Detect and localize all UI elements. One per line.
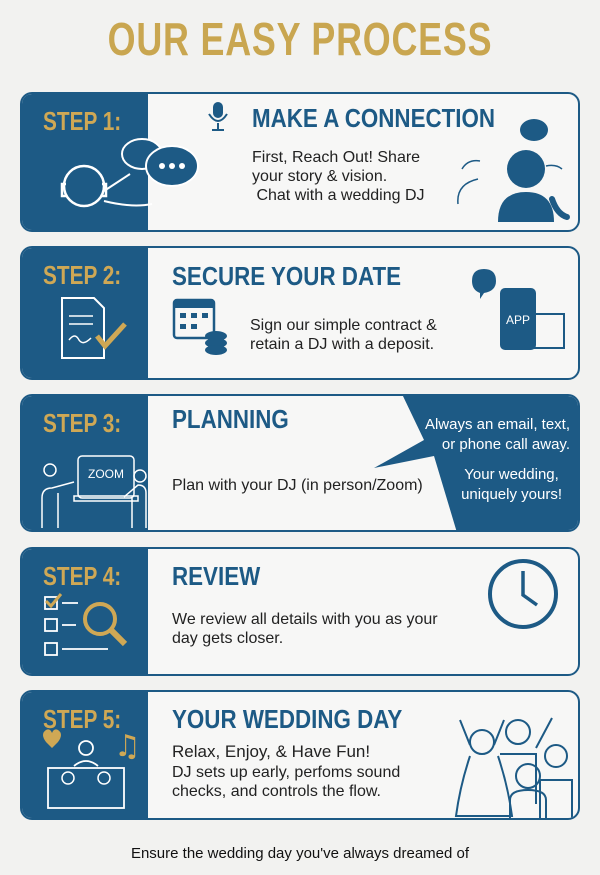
text: Plan with your DJ (in person/Zoom)	[172, 477, 423, 494]
icon: calendar and coins	[172, 298, 227, 355]
icon: wedding party illustration	[454, 718, 573, 818]
icon: person with arrows and phone	[457, 119, 570, 222]
text: day gets closer.	[172, 630, 283, 647]
panel: step 4	[20, 547, 580, 676]
panel: step 3: uniquely yours!	[461, 486, 562, 503]
panel: step 3: Your wedding,	[464, 466, 559, 483]
step 1 label: STEP 1:	[43, 106, 121, 136]
panel: step 1	[20, 92, 580, 232]
callout shape	[374, 396, 578, 530]
icon: two people with zoom screen	[41, 455, 147, 528]
text: your story & vision.	[252, 168, 387, 185]
heading: REVIEW	[172, 561, 260, 591]
text: retain a DJ with a deposit.	[250, 336, 434, 353]
panel: step 5	[20, 690, 580, 820]
step 5 label: STEP 5:	[43, 704, 121, 734]
heading: YOUR WEDDING DAY	[172, 704, 402, 734]
icon: app phone	[472, 269, 565, 350]
step 2 label: STEP 2:	[43, 260, 121, 290]
callout text: or phone call away.	[442, 436, 570, 453]
text: Relax, Enjoy, & Have Fun!	[172, 742, 370, 761]
heading: MAKE A CONNECTION	[252, 103, 495, 133]
text: We review all details with you as your	[172, 611, 438, 628]
icon: DJ booth with heart and note	[43, 729, 141, 809]
title: OUR EASY PROCESS	[108, 13, 492, 65]
text	[172, 611, 438, 647]
heading: SECURE YOUR DATE	[172, 261, 401, 291]
heading: PLANNING	[172, 404, 289, 434]
text: First, Reach Out! Share	[252, 149, 420, 166]
callout text: Always an email, text,	[425, 416, 570, 433]
icon: headset person with chat bubbles	[60, 138, 199, 208]
step 3 label: STEP 3:	[43, 408, 121, 438]
icon: checklist with magnifier	[44, 593, 128, 656]
callout text	[425, 416, 570, 453]
panel: step 5: DJ sets up early, perfoms sound	[172, 764, 400, 781]
text: Sign our simple contract &	[250, 317, 437, 334]
text	[252, 149, 425, 204]
panel: step 2	[20, 246, 580, 380]
panel: step 5: checks, and controls the flow.	[172, 783, 381, 800]
step 4 label: STEP 4:	[43, 561, 121, 591]
icon: microphone	[208, 102, 228, 131]
text: Chat with a wedding DJ	[256, 187, 425, 204]
footer text: Ensure the wedding day you've always dreamed of	[131, 845, 469, 862]
icon: clock	[488, 559, 558, 629]
icon: contract with check	[61, 297, 127, 359]
panel: step 3	[20, 394, 580, 532]
icon: DJ booth with heart and note: ♫	[114, 729, 141, 764]
icon: two people with zoom screen: ZOOM	[88, 467, 124, 481]
text	[250, 317, 437, 353]
icon: app phone: APP	[506, 313, 530, 327]
